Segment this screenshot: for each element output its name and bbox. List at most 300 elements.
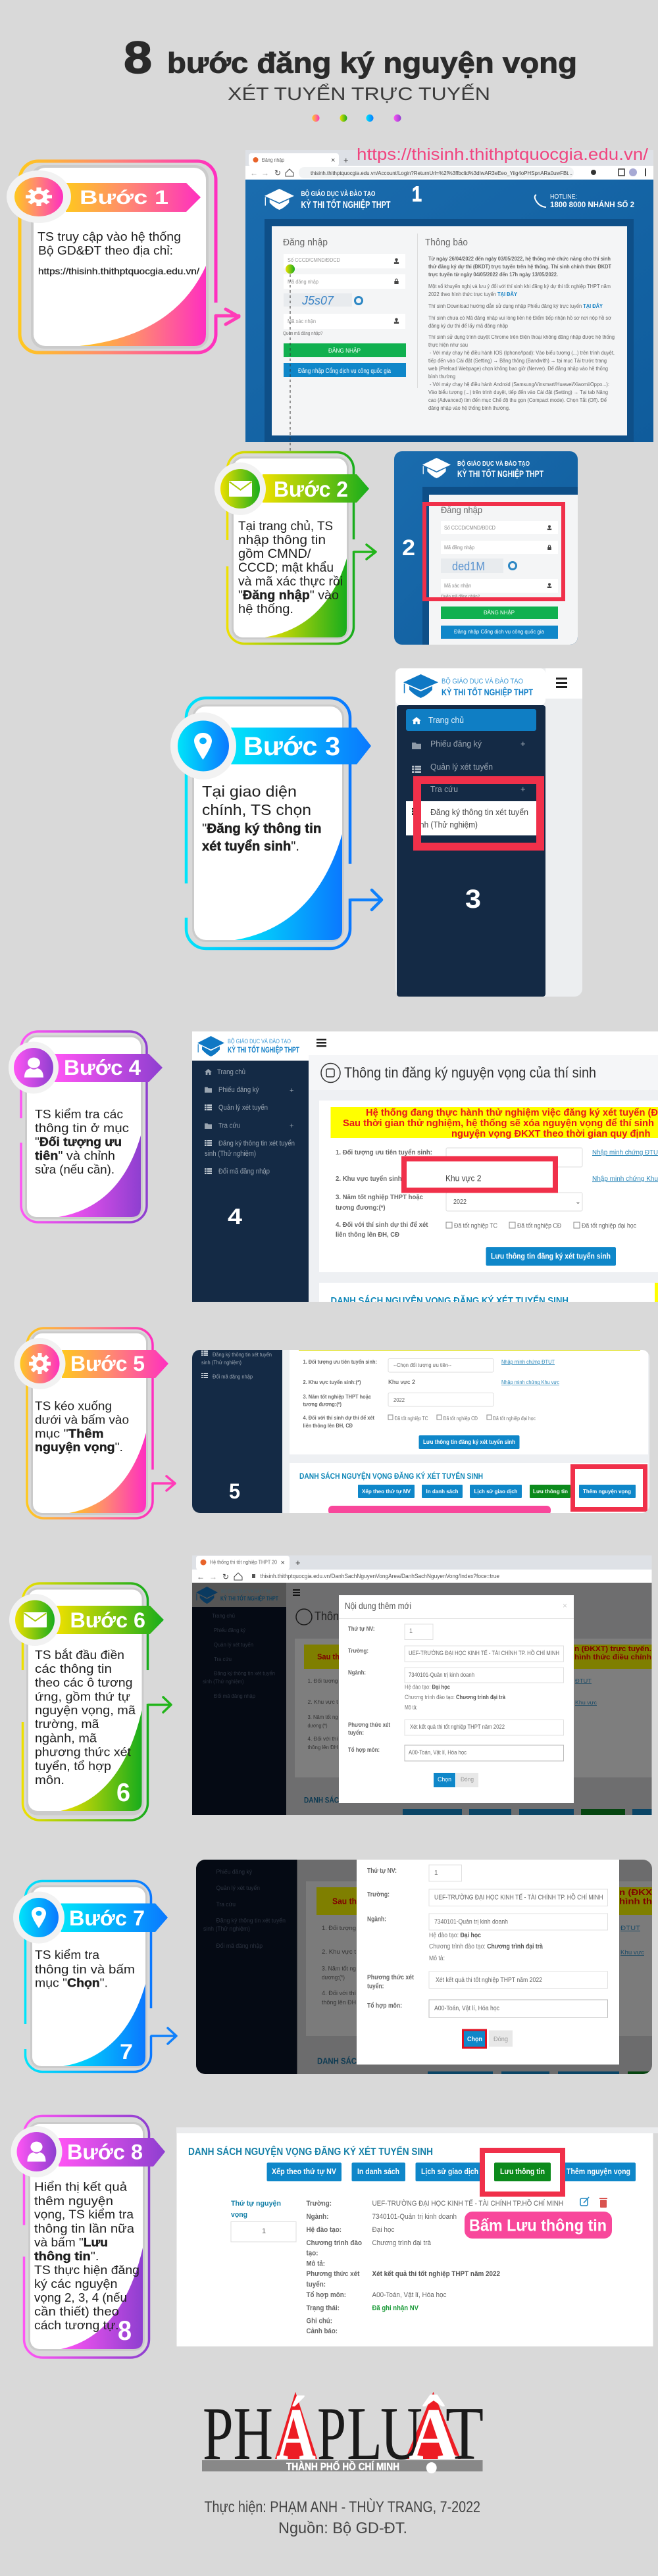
icon: gear [7, 170, 71, 223]
step 6 text: phương thức xét [35, 1745, 131, 1759]
browser bar: ← [197, 1572, 205, 1581]
step number 7: 7 [120, 2040, 133, 2064]
sidebar menu: Đăng ký thông tin xét tuyển [430, 807, 528, 817]
dimmed sidebar: Tra cứu [214, 1656, 232, 1662]
sidebar menu: + [520, 784, 526, 794]
panel: step 2 card [215, 453, 376, 643]
step 3 text: "Đăng ký thông tin [202, 822, 321, 836]
step 2 text: và mã xác thực rồi [238, 575, 343, 589]
notice text: đăng nhập vào hệ thống bình thường. [428, 405, 510, 411]
registration form: 1. Đối tượng ưu tiên tuyển sinh: [336, 1149, 432, 1156]
step 8 text: cần thiết) theo [34, 2304, 119, 2318]
list heading [331, 1283, 658, 1302]
step 2 text: nhập thông tin [238, 533, 326, 547]
step 8 heading: Bước 8 [67, 2141, 143, 2164]
browser bar: Đăng nhập [262, 157, 284, 163]
logo: BỘ GIÁO DỤC VÀ ĐÀO TẠO [442, 677, 523, 685]
result details: vọng [231, 2211, 247, 2219]
action buttons: Lịch sử giao dịch [421, 2167, 478, 2176]
login form: ĐĂNG NHẬP [484, 609, 515, 616]
step 8 text: vọng, TS kiểm tra [34, 2208, 134, 2221]
modal dialog: Phương thức xét [348, 1721, 390, 1728]
red highlight [572, 1467, 645, 1509]
logo: BỘ GIÁO DỤC VÀ ĐÀO TẠO [228, 1038, 291, 1045]
step 1 frame [20, 161, 216, 353]
modal dialog: Nội dung thêm mới [345, 1600, 411, 1611]
dimmed page content: hình thức điều chỉnh [574, 1654, 651, 1662]
browser bar: → [261, 168, 269, 178]
form: --Chọn đối tượng ưu tiên-- [393, 1362, 451, 1368]
action buttons: Lưu thông tin [500, 2167, 545, 2176]
step 7 ribbon [61, 1904, 168, 1932]
login form: Mã xác nhận [444, 583, 471, 589]
step 5 frame [27, 1328, 153, 1518]
modal dialog: Ngành: [367, 1916, 386, 1923]
dimmed header [192, 1583, 300, 1607]
step 6 heading: Bước 6 [70, 1608, 145, 1632]
step 5 ribbon [62, 1350, 168, 1378]
dimmed page content: Thôn [315, 1610, 339, 1623]
arrow: step 2 [354, 545, 376, 559]
browser bar: thisinh.thithptquocgia.edu.vn/DanhSachNguyenVongArea/DanhSachNguyenVong/Index?foce=true [261, 1573, 499, 1580]
step 2 text: CCCD; mật khẩu [238, 561, 334, 575]
dimmed page content: hình th [619, 1896, 652, 1906]
title: bước đăng ký nguyện vọng [167, 47, 577, 79]
modal dialog [357, 1860, 619, 2064]
list heading: DANH SÁCH NGUYỆN VỌNG ĐĂNG KÝ XÉT TUYỂN SINH [299, 1472, 483, 1481]
step 2 text: hệ thống. [238, 603, 293, 616]
browser bar: × [331, 157, 335, 164]
step 3 frame [186, 698, 350, 949]
step number 8: 8 [118, 2315, 132, 2346]
dimmed page content: 3. Năm tốt ng [322, 1966, 356, 1972]
action buttons: Xếp theo thứ tự NV [362, 1488, 411, 1495]
form: 3. Năm tốt nghiệp THPT hoặc [303, 1394, 372, 1400]
callout [465, 2212, 612, 2239]
modal dialog: Trường: [367, 1891, 390, 1898]
credits: Thực hiện: PHẠM ANH - THÙY TRANG, 7-2022 [204, 2498, 480, 2516]
logo: BỘ GIÁO DỤC VÀ ĐÀO TẠO [301, 189, 376, 198]
step 2 text: gồm CMND/ [238, 547, 311, 561]
step 2 ribbon [263, 474, 369, 503]
dimmed page content: 4. Đối với thí [322, 1990, 356, 1997]
warning banner: Sau thời gian thử nghiệm, hệ thống sẽ xóa nguyện vọng để thí sinh [343, 1118, 654, 1129]
step 2 text: Tại trang chủ, TS [238, 520, 333, 533]
result details: Thứ tự nguyện [231, 2200, 281, 2208]
notice text: Từ ngày 26/04/2022 đến ngày 03/05/2022, hệ thống mở chức năng cho thí sinh [428, 255, 611, 262]
step 7 text: TS kiểm tra [35, 1948, 100, 1962]
warning banner [330, 1107, 658, 1139]
step 3 heading: Bước 3 [243, 732, 340, 761]
step 4 frame [21, 1031, 147, 1222]
notice text: thực hiện như sau [428, 341, 468, 348]
logo: KỲ THI TỐT NGHIỆP THPT [457, 468, 544, 479]
login form: Số CCCD/CMND/ĐDCD [288, 257, 340, 263]
dimmed sidebar: Đăng ký thông tin xét tuyển [216, 1917, 286, 1925]
result details: tuyển: [307, 2281, 326, 2289]
dimmed page content: dương:(*) [322, 1974, 345, 1981]
dimmed page content: 2. Khu vực t [308, 1698, 338, 1705]
logo: BỘ GIÁO DỤC VÀ ĐÀO TẠO [457, 459, 530, 468]
dimmed sidebar: Phiếu đăng ký [214, 1627, 246, 1633]
arrow: step 3 [351, 890, 382, 910]
dimmed page content [306, 1881, 652, 2074]
sidebar menu: Tra cứu [218, 1122, 240, 1130]
modal dialog: Chọn [467, 2036, 482, 2043]
dimmed page content: ĐTUT [575, 1677, 592, 1684]
url label: https://thisinh.thithptquocgia.edu.vn/ [357, 145, 648, 164]
dimmed page content: Khu vực [575, 1699, 597, 1706]
dimmed page content: 2. Khu vực t [322, 1948, 356, 1956]
step 4 text: sửa (nếu cần). [35, 1162, 114, 1176]
login form: ĐĂNG NHẬP [328, 347, 361, 354]
panel: step 7 screenshot [196, 1860, 652, 2074]
panel: step 1 card [7, 161, 239, 353]
form: tương đương:(*) [303, 1401, 342, 1408]
step 2 frame [228, 453, 354, 643]
result details: Chương trình đại trà [372, 2239, 432, 2247]
sidebar menu: + [290, 1122, 293, 1130]
step 4 text: tiên" và chỉnh [35, 1149, 115, 1162]
notice text: Vào biểu tượng (...) trên trình duyệt, tiếp đến vào Cài đặt (Setting) → Tại tab Nâng [428, 389, 608, 395]
connector: dotted line with green dot [286, 264, 295, 452]
result details: Xét kết quả thi tốt nghiệp THPT năm 2022 [372, 2270, 500, 2278]
step number 6: 6 [116, 1779, 130, 1807]
step 1 text: TS truy cập vào hệ thống [38, 230, 181, 243]
modal dialog: Xét kết quả thi tốt nghiệp THPT năm 2022 [436, 1976, 542, 1984]
step 8 text: và bấm "Lưu [34, 2235, 108, 2249]
browser bar [245, 150, 653, 180]
notice text: Một số khuyến nghị và lưu ý đối với thí sinh khi đăng ký dự thi tốt nghiệp THPT năm [428, 283, 611, 289]
step 2 heading: Bước 2 [274, 477, 348, 501]
menu icon [316, 1039, 326, 1047]
modal dialog: × [563, 1601, 567, 1610]
step 7 text: thông tin và bấm [35, 1962, 135, 1976]
notice text: Thí sinh sử dụng trình duyệt Chrome trên Điện thoại không đăng nhập được hệ thống [428, 334, 615, 340]
logo: Pháp Luật: Á [276, 2394, 316, 2475]
step 8 text: thông tin ". [34, 2249, 99, 2263]
sidebar: Đăng ký thông tin xét tuyển [213, 1351, 272, 1358]
warning banner: nguyện vọng ĐKXT theo thời gian quy định [451, 1128, 650, 1139]
dimmed page content: n (ĐKXT) trực tuyến. [574, 1645, 651, 1653]
logo: Pháp Luật [202, 2392, 484, 2475]
dimmed page content: Sau th [317, 1652, 340, 1662]
step 2 text: "Đăng nhập" vào [238, 589, 339, 603]
modal dialog: UEF-TRƯỜNG ĐẠI HỌC KINH TẾ - TÀI CHÍNH TP. HỒ CHÍ MINH [434, 1893, 603, 1901]
dimmed page content: 1. Đối tượng [308, 1677, 338, 1684]
modal dialog: Chương trình đào tạo: Chương trình đại trà [405, 1694, 506, 1700]
dimmed page content: thông lên ĐH [308, 1744, 338, 1750]
logo: Pháp Luật: P [317, 2392, 346, 2475]
result details: Đã ghi nhận NV [372, 2304, 419, 2312]
result details: Chương trình đào [307, 2239, 362, 2247]
modal dialog: Mô tả: [429, 1955, 445, 1962]
login form: Số CCCD/CMND/ĐDCD [444, 525, 495, 531]
dimmed page content: dương:(*) [308, 1722, 328, 1729]
sidebar menu: Phiếu đăng ký [218, 1086, 259, 1094]
panel: step 5 card [14, 1328, 175, 1518]
logo: Pháp Luật: L [347, 2392, 382, 2475]
result details: Đại học [372, 2226, 395, 2234]
form [303, 1359, 559, 1449]
result details: A00-Toán, Vật lí, Hóa học [372, 2291, 447, 2299]
notice text: web (Preload Webpage) chọn không bao giờ (Nerver). Để đăng nhập vào hệ thống [428, 365, 608, 372]
logo: Pháp Luật: THÀNH PHỐ HỒ CHÍ MINH [286, 2460, 399, 2473]
action buttons: In danh sách [357, 2167, 399, 2176]
modal dialog: Hệ đào tạo: Đại học [405, 1684, 450, 1691]
panel: step 7 card [13, 1881, 176, 2072]
logo: Pháp Luật: PH [203, 2392, 273, 2475]
modal dialog: Hệ đào tạo: Đại học [429, 1932, 481, 1939]
step number 2: 2 [402, 535, 415, 560]
browser bar: ↻ [222, 1572, 229, 1581]
panel: step 2 screenshot [394, 451, 578, 645]
step 5 text: TS kéo xuống [35, 1399, 112, 1413]
dimmed page content: thông lên ĐH [322, 1999, 356, 2006]
red highlight [404, 1159, 555, 1191]
modal dialog: 7340101-Quản trị kinh doanh [409, 1672, 474, 1678]
callout: Bấm Lưu thông tin [469, 2217, 607, 2235]
result details: Trường: [307, 2200, 332, 2208]
sidebar [192, 1350, 282, 1513]
dimmed header: BỘ GIÁO DỤC VÀ ĐÀO TẠO [221, 1588, 272, 1595]
modal dialog: Xét kết quả thi tốt nghiệp THPT năm 2022 [410, 1723, 505, 1730]
panel: step 6 card [9, 1583, 171, 1820]
dimmed header: KỲ THI TỐT NGHIỆP THPT [220, 1595, 278, 1602]
result details: Cảnh báo: [307, 2327, 338, 2335]
arrow: step 1 [216, 309, 239, 324]
step 3 text: xét tuyển sinh". [202, 839, 299, 854]
modal dialog: Tổ hợp môn: [367, 2002, 402, 2010]
panel: step 4 screenshot [192, 1031, 658, 1306]
dimmed sidebar [196, 1860, 297, 2074]
sidebar menu [205, 1068, 295, 1176]
step 8 text: ký các nguyện [34, 2277, 117, 2291]
form: 2. Khu vực tuyển sinh:(*) [303, 1379, 361, 1385]
registration form: Lưu thông tin đăng ký xét tuyển sinh [491, 1252, 611, 1260]
login form: Mã đăng nhập [444, 545, 474, 551]
sidebar menu: Quản lý xét tuyển [218, 1104, 268, 1112]
login form: J5s07 [301, 294, 334, 307]
notice text: thử đăng ký dự thi (ĐKDT) trực tuyến trên hệ thống. Thí sinh chính thức ĐKDT [428, 263, 612, 270]
step 1 text: https://thisinh.thithptquocgia.edu.vn/ [38, 266, 199, 276]
step 6 text: TS bắt đầu điền [35, 1648, 124, 1662]
modal dialog: Trường: [348, 1647, 368, 1654]
login form: ded1M [452, 560, 485, 573]
dimmed sidebar: Tra cứu [216, 1901, 236, 1908]
step 4 text: TS kiểm tra các [35, 1107, 123, 1121]
modal dialog: 1 [409, 1627, 413, 1634]
sidebar menu: Trang chủ [428, 715, 464, 725]
step 8 text: Hiển thị kết quả [34, 2180, 128, 2193]
step 2 text [238, 520, 343, 616]
modal dialog: tuyển: [367, 1983, 384, 1991]
form: Đã tốt nghiệp CĐ [443, 1416, 478, 1422]
notice text: Thí sinh Download hướng dẫn sử dụng nhập Phiếu đăng ký trực tuyến TẠI ĐÂY [428, 302, 603, 309]
modal dialog: A00-Toán, Vật lí, Hóa học [409, 1749, 467, 1756]
step 7 frame [25, 1881, 151, 2072]
step 4 text: "Đối tượng ưu [35, 1135, 122, 1149]
logo [422, 458, 544, 479]
dimmed sidebar: Đăng ký thông tin xét tuyển [214, 1670, 275, 1676]
registration form: 4. Đối với thí sinh dự thi để xét [336, 1221, 428, 1229]
action buttons [267, 2150, 636, 2194]
notice text [425, 237, 615, 411]
warning banner: Hệ thống đang thực hành thử nghiệm việc đăng ký xét tuyển (Đ [366, 1107, 658, 1118]
sidebar menu: Quản lý xét tuyển [430, 762, 493, 772]
page title: Thông tin đăng ký nguyện vọng của thí sinh [344, 1064, 596, 1081]
step 4 ribbon [55, 1054, 163, 1082]
arrow: step 6 [148, 1697, 171, 1712]
logo: KỲ THI TỐT NGHIỆP THPT [442, 686, 533, 697]
form: Khu vực 2 [388, 1379, 415, 1386]
login form: Đăng nhập Cổng dịch vụ công quốc gia [454, 628, 544, 635]
hotline [535, 193, 634, 209]
result details: Trạng thái: [307, 2304, 340, 2312]
step 4 text: thông tin ở mục [35, 1121, 129, 1135]
browser bar: × [280, 1559, 285, 1567]
notice text: trực tuyến từ ngày 04/05/2022 đến 17h ngày 13/05/2022. [428, 271, 558, 278]
notice text: tiếp đến vào Cài đặt (Setting) → Băng thông (Bandwith) → tại mục Tải trước trang [428, 357, 607, 364]
title: 8 [124, 32, 152, 83]
step 1 text: Bộ GD&ĐT theo địa chỉ: [38, 244, 173, 257]
step 3 text: Tại giao diện [202, 783, 297, 800]
notice text: bình thường [428, 373, 455, 380]
step 1 text [38, 230, 199, 276]
logo [197, 1036, 299, 1056]
browser bar: ↻ [274, 168, 281, 178]
icon: location pin [170, 712, 236, 780]
step 6 text [35, 1648, 136, 1787]
panel: step 5 screenshot [192, 1350, 649, 1515]
decorative dots [312, 114, 401, 122]
modal dialog: Ngành: [348, 1670, 366, 1676]
modal dialog: Thứ tự NV: [367, 1868, 397, 1875]
dimmed page content: Sau th [332, 1896, 357, 1906]
step 5 text: dưới và bấm vào [35, 1413, 129, 1426]
icon: edit [580, 2197, 589, 2206]
hotline: 1800 8000 NHÁNH SỐ 2 [550, 199, 634, 209]
dimmed sidebar [192, 1607, 286, 1815]
logo: KỲ THI TỐT NGHIỆP THPT [301, 199, 391, 211]
login form: Mã xác nhận [288, 318, 316, 324]
login form [283, 237, 406, 377]
subtitle: XÉT TUYỂN TRỰC TUYẾN [228, 84, 490, 104]
modal dialog: Đóng [461, 1776, 474, 1783]
modal dialog: Chọn [438, 1776, 451, 1783]
sidebar: sinh (Thử nghiệm) [201, 1359, 241, 1366]
result details: 1 [262, 2227, 266, 2235]
red highlight: Khu vực 2 [445, 1174, 482, 1183]
modal dialog: A00-Toán, Vật lí, Hóa học [434, 2005, 499, 2012]
form: Đã tốt nghiệp đại học [493, 1416, 536, 1422]
result details: Tổ hợp môn: [307, 2291, 346, 2299]
form: 2022 [393, 1397, 405, 1403]
dimmed page content: ĐTUT [620, 1925, 640, 1932]
sidebar menu [406, 709, 536, 835]
step 5 text: nguyện vọng ". [35, 1440, 123, 1454]
dimmed page content: DANH SÁC [304, 1795, 339, 1805]
dimmed page content: n (ĐKX [619, 1887, 652, 1897]
modal dialog: Tổ hợp môn: [348, 1746, 380, 1753]
modal dialog: 1 [434, 1870, 438, 1877]
panel: step 8 screenshot [176, 2127, 658, 2346]
modal dialog: Mô tả: [405, 1704, 417, 1710]
dimmed sidebar: Trang chủ [212, 1612, 235, 1619]
step 4 text [35, 1107, 129, 1176]
registration form: ⌄ [575, 1198, 581, 1206]
login form: Quên mã đăng nhập? [441, 595, 480, 599]
browser bar: + [343, 155, 349, 165]
registration form: Đã tốt nghiệp CĐ [517, 1222, 561, 1230]
sidebar menu: + [520, 739, 526, 749]
action buttons: Lịch sử giao dịch [474, 1488, 517, 1495]
sidebar menu: Phiếu đăng ký [430, 739, 482, 749]
step 6 text: môn. [35, 1773, 64, 1787]
step 8 text [34, 2180, 139, 2332]
result details: Phương thức xét [307, 2270, 360, 2278]
step 8 text: thông tin lần nữa [34, 2221, 135, 2235]
step 3 ribbon [231, 728, 371, 764]
icon: person [9, 1042, 59, 1093]
dimmed page content: 4. Đối với thí [308, 1735, 338, 1742]
result details: Ghi chú: [307, 2317, 332, 2325]
step number 4: 4 [228, 1204, 242, 1229]
registration form: Đã tốt nghiệp đại học [582, 1222, 636, 1230]
credits [204, 2498, 480, 2537]
step 4 heading: Bước 4 [64, 1056, 141, 1079]
dimmed page content: 1. Đối tượng [322, 1925, 356, 1932]
result details: Mô tả: [307, 2260, 325, 2268]
step 8 text: cách tương tự. [34, 2318, 118, 2332]
icon: gear [14, 1338, 66, 1389]
panel: step 8 card [11, 2116, 165, 2358]
step 5 text [35, 1399, 129, 1454]
modal dialog: Phương thức xét [367, 1974, 415, 1981]
step 7 heading: Bước 7 [69, 1906, 145, 1930]
sidebar menu: Đổi mã đăng nhập [218, 1168, 270, 1176]
result details: 7340101-Quản trị kinh doanh [372, 2213, 457, 2221]
step 6 text: nguyện vọng, mã [35, 1703, 136, 1717]
icon: location pin [13, 1892, 64, 1943]
hotline: HOTLINE: [550, 193, 577, 201]
form: 4. Đối với thí sinh dự thi để xét [303, 1415, 374, 1421]
browser bar: thisinh.thithptquocgia.edu.vn/Account/Login?ReturnUrl=%2f%3ffbclid%3dIwAR3eEeo_Yiig4oPHSpnARa0uwFBt... [311, 170, 572, 176]
red highlight [424, 504, 563, 599]
action buttons: Thêm nguyện vọng [567, 2167, 630, 2176]
step 8 text: TS thực hiện đăng [34, 2263, 139, 2277]
dimmed sidebar: Đổi mã đăng nhập [214, 1693, 255, 1699]
action buttons [358, 1485, 636, 1498]
step number 1: 1 [412, 182, 422, 206]
result details: UEF-TRƯỜNG ĐẠI HỌC KINH TẾ - TÀI CHÍNH TP.HỒ CHÍ MINH [372, 2199, 563, 2208]
panel: step 3 screenshot [395, 668, 582, 997]
step 8 text: vọng 2, 3, 4 (nếu [34, 2291, 127, 2304]
login form: Mã đăng nhập [288, 278, 318, 285]
step 7 text [35, 1948, 135, 1989]
arrow: step 5 [153, 1476, 175, 1491]
form: Nhập minh chứng ĐTUT [501, 1359, 555, 1365]
login form: Đăng nhập [283, 237, 328, 248]
step 5 heading: Bước 5 [70, 1352, 145, 1375]
step 3 text [202, 783, 321, 854]
result details: Ngành: [307, 2213, 329, 2221]
dimmed sidebar: sinh (Thử nghiệm) [203, 1925, 250, 1933]
form: Lưu thông tin đăng ký xét tuyển sinh [423, 1439, 515, 1445]
browser bar: Hệ thống thi tốt nghiệp THPT 20 [210, 1559, 277, 1566]
dimmed page content: Khu vực [620, 1949, 644, 1956]
logo: Pháp Luật: T [445, 2392, 484, 2475]
